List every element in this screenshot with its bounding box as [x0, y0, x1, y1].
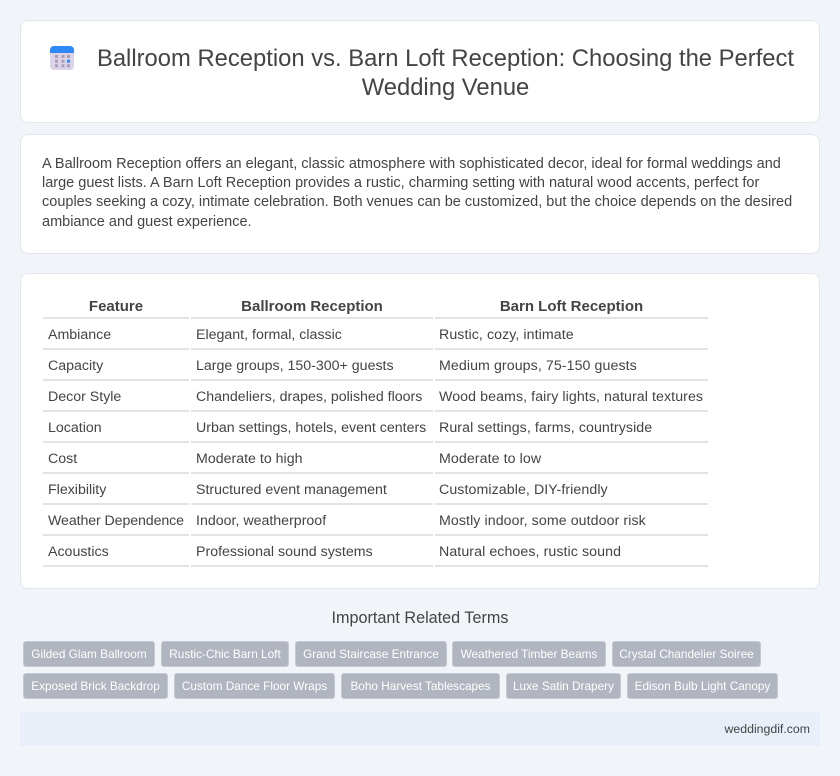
- row: Cost: Cost: [48, 451, 77, 467]
- row: Capacity: Medium groups, 75-150 guests: [439, 358, 637, 374]
- icon: calendar: [50, 46, 74, 70]
- intro text: large guest lists. A Barn Loft Reception provides a rustic, charming setting with natural wood accents, perfect for: [42, 175, 759, 191]
- row: Decor Style: Wood beams, fairy lights, natural textures: [439, 389, 703, 405]
- table header: Ballroom Reception: [241, 298, 383, 315]
- row: Acoustics: Professional sound systems: [196, 544, 373, 560]
- panel: intro: [20, 134, 820, 254]
- row: Decor Style: Chandeliers, drapes, polished floors: [196, 389, 422, 405]
- row: Cost: Moderate to low: [439, 451, 541, 467]
- tag: [23, 673, 168, 699]
- row: Flexibility: Structured event management: [196, 482, 387, 498]
- footer bar: [20, 712, 820, 746]
- row: Capacity: Capacity: [48, 358, 103, 374]
- tag: [627, 673, 778, 699]
- tag: Boho Harvest Tablescapes: [350, 679, 491, 693]
- row: Decor Style: Decor Style: [48, 389, 121, 405]
- row: Acoustics: [43, 534, 708, 567]
- tag: Luxe Satin Drapery: [513, 679, 614, 693]
- row: Capacity: Large groups, 150-300+ guests: [196, 358, 394, 374]
- row: Ambiance: [43, 317, 708, 343]
- row: Flexibility: [43, 472, 708, 498]
- tag: [174, 673, 335, 699]
- row: Weather Dependence: [43, 503, 708, 529]
- row: Weather Dependence: Mostly indoor, some outdoor risk: [439, 513, 646, 529]
- intro text: couples seeking a cozy, intimate celebration. Both venues can be customized, but the choice depends on the desired: [42, 194, 792, 210]
- intro text: [42, 156, 792, 230]
- row: Flexibility: Customizable, DIY-friendly: [439, 482, 608, 498]
- row: Capacity: [43, 348, 708, 374]
- title: [97, 45, 794, 101]
- title: Ballroom Reception vs. Barn Loft Reception: Choosing the Perfect: [97, 45, 794, 72]
- row: Weather Dependence: Indoor, weatherproof: [196, 513, 326, 529]
- title: Wedding Venue: [362, 74, 529, 101]
- tag: [341, 673, 500, 699]
- comparison table: [43, 298, 708, 567]
- row: Weather Dependence: Weather Dependence: [48, 513, 184, 529]
- intro text: ambiance and guest experience.: [42, 214, 252, 230]
- row: Ambiance: Rustic, cozy, intimate: [439, 327, 574, 343]
- tag: Weathered Timber Beams: [461, 647, 597, 661]
- table header: [89, 298, 643, 315]
- row: Flexibility: Flexibility: [48, 482, 106, 498]
- related terms heading: Important Related Terms: [332, 609, 508, 627]
- row: Ambiance: Ambiance: [48, 327, 111, 343]
- footer text: weddingdif.com: [725, 722, 810, 736]
- row: Location: Location: [48, 420, 102, 436]
- row: Acoustics: Acoustics: [48, 544, 109, 560]
- tag: Custom Dance Floor Wraps: [182, 679, 327, 693]
- tag: [612, 641, 761, 667]
- table header: Feature: [89, 298, 143, 315]
- row: Acoustics: Natural echoes, rustic sound: [439, 544, 621, 560]
- row: Location: [43, 410, 708, 436]
- row: Location: Urban settings, hotels, event centers: [196, 420, 426, 436]
- tag: [452, 641, 606, 667]
- tag: Rustic-Chic Barn Loft: [169, 647, 281, 661]
- tag: Crystal Chandelier Soiree: [619, 647, 754, 661]
- row: Decor Style: [43, 379, 708, 405]
- tag: [161, 641, 289, 667]
- row: Cost: [43, 441, 708, 467]
- table header: Barn Loft Reception: [500, 298, 643, 315]
- tag: [295, 641, 447, 667]
- row: Location: Rural settings, farms, countryside: [439, 420, 652, 436]
- tag: Exposed Brick Backdrop: [31, 679, 160, 693]
- row: Ambiance: Elegant, formal, classic: [196, 327, 342, 343]
- intro text: A Ballroom Reception offers an elegant, classic atmosphere with sophisticated decor, ideal for formal weddings and: [42, 156, 781, 172]
- tag: [23, 641, 155, 667]
- tag: Edison Bulb Light Canopy: [635, 679, 770, 693]
- row: Cost: Moderate to high: [196, 451, 302, 467]
- tag: [506, 673, 621, 699]
- tag: Gilded Glam Ballroom: [31, 647, 147, 661]
- tag: Grand Staircase Entrance: [303, 647, 439, 661]
- panel: title card: [20, 20, 820, 123]
- panel: comparison table card: [20, 273, 820, 589]
